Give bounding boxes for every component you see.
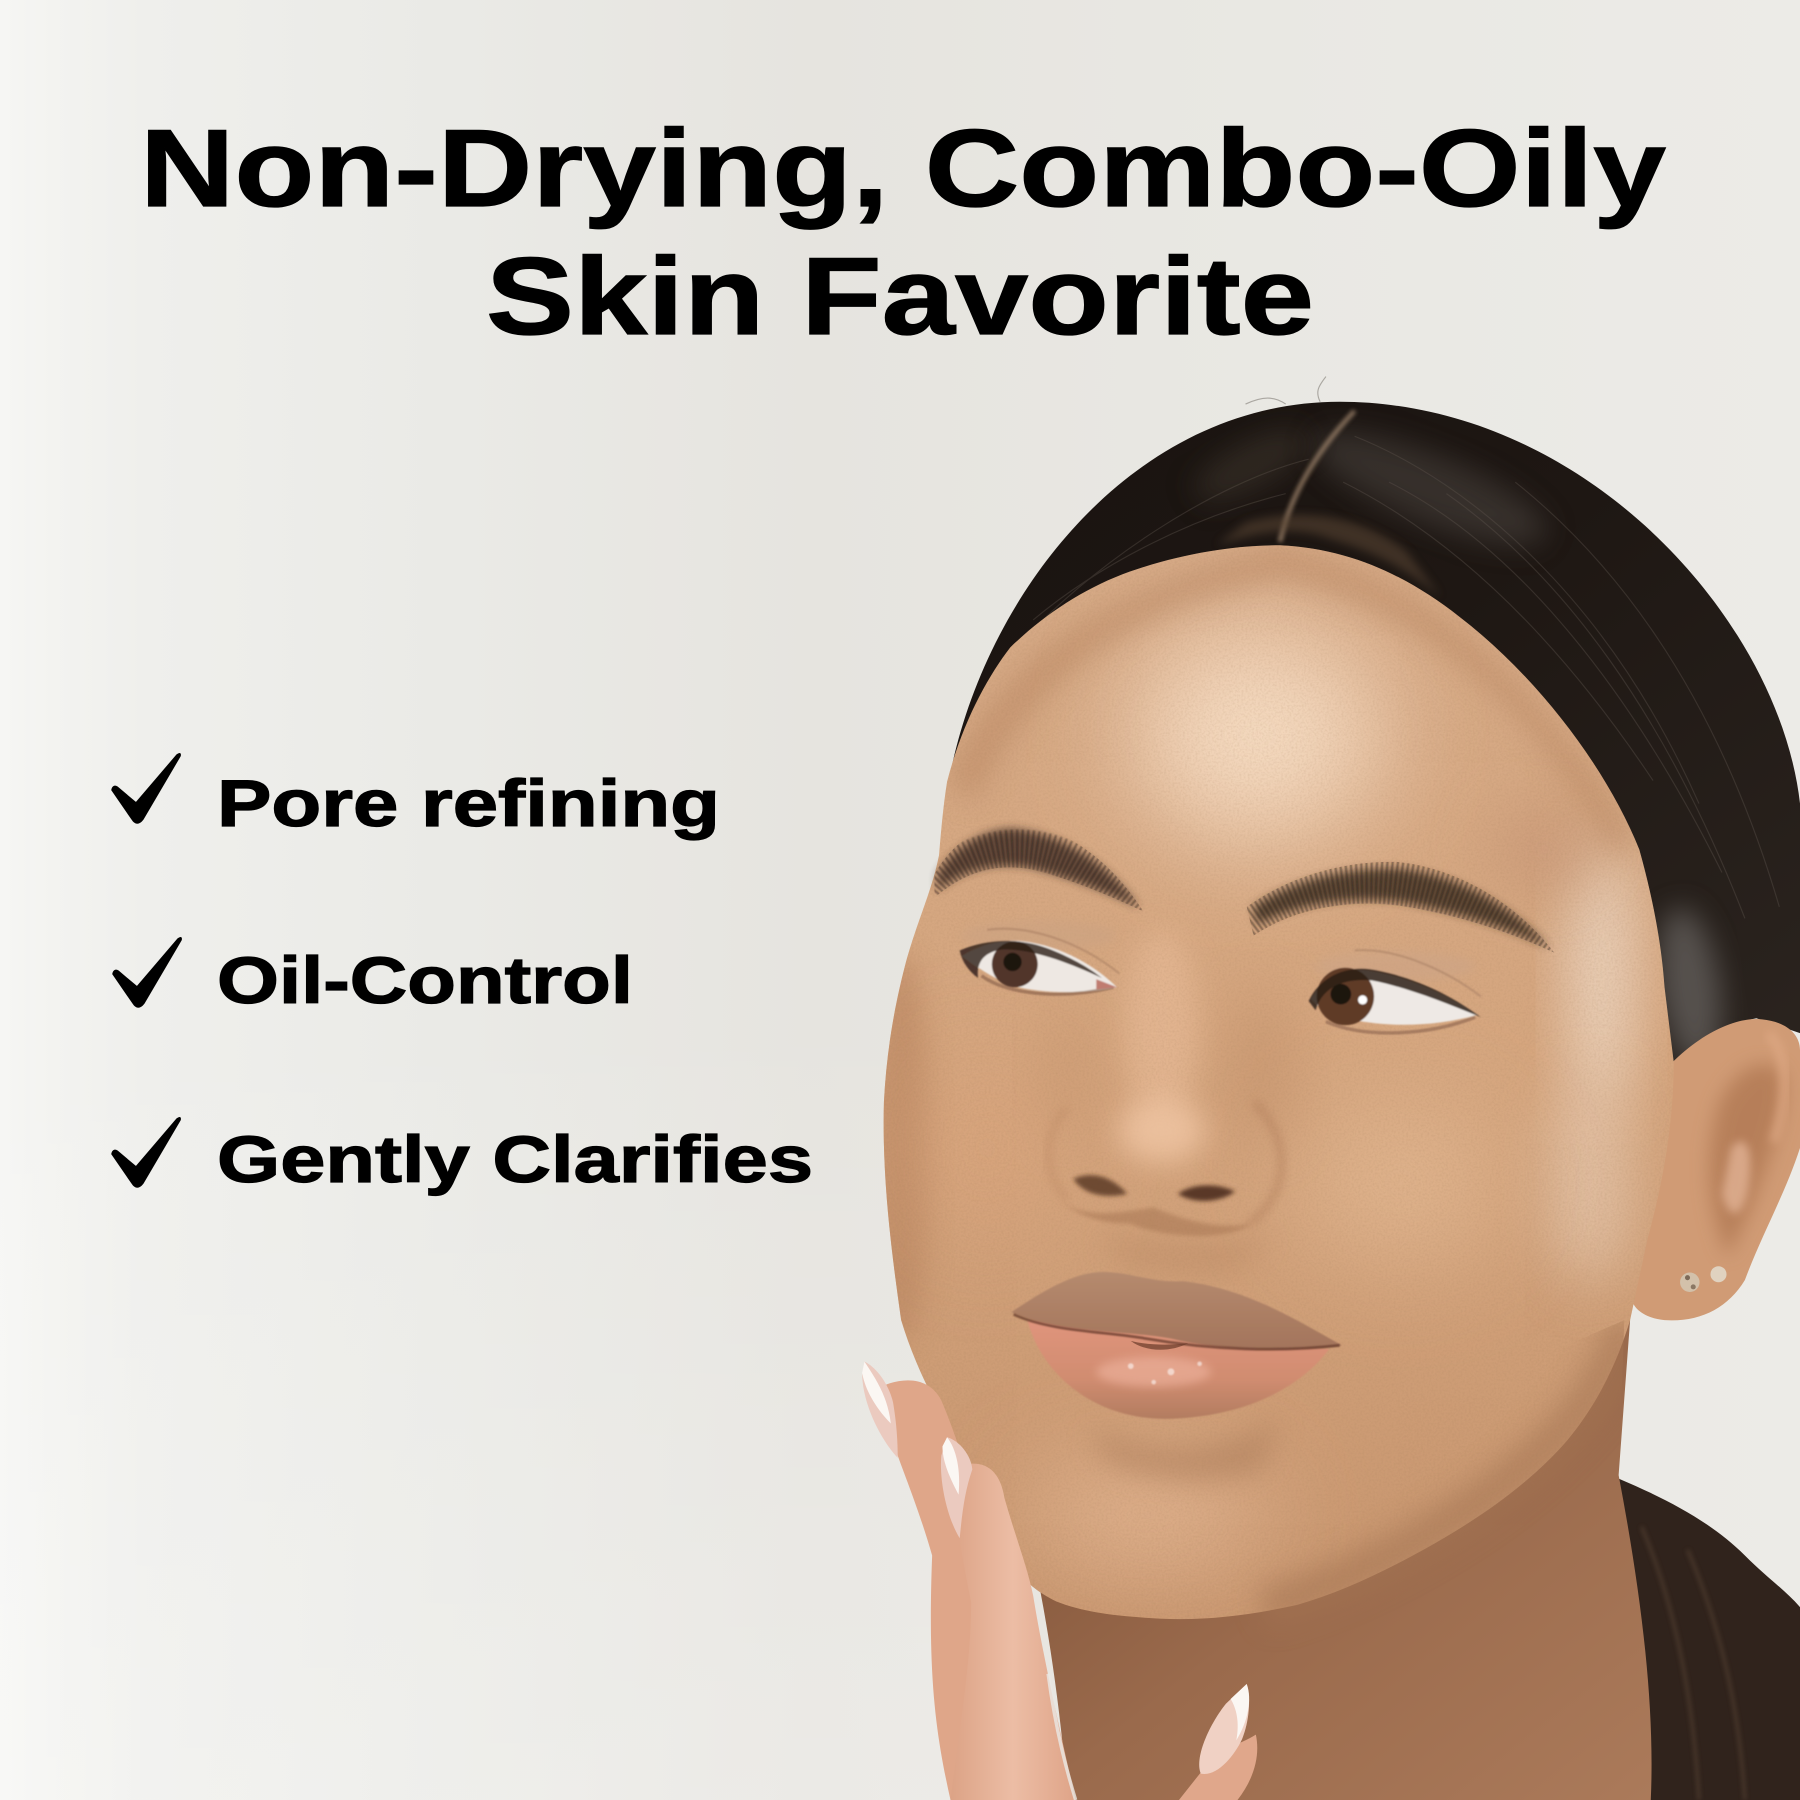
right eyebrow — [1246, 869, 1559, 959]
ponytail — [1619, 1479, 1800, 1800]
left eyebrow — [932, 829, 1148, 918]
earrings — [1680, 1266, 1727, 1292]
benefit: oil control: Oil-Control — [217, 943, 633, 1017]
forehead edge shade — [947, 545, 1639, 849]
skin texture — [872, 540, 1688, 1630]
jaw shadow — [1263, 1320, 1628, 1607]
hand and fingers — [862, 1361, 1257, 1800]
face — [871, 540, 1688, 1630]
nose — [1049, 1099, 1281, 1236]
ear — [1630, 1019, 1800, 1320]
photo: woman with hand on cheek — [862, 377, 1800, 1800]
title: Skin Favorite — [486, 235, 1314, 358]
nostrils — [1073, 1175, 1235, 1201]
icon: check mark — [112, 1118, 180, 1187]
brow blush — [1524, 820, 1602, 896]
hair — [947, 377, 1800, 1071]
forehead highlight — [1131, 626, 1383, 844]
under nose shadow — [1203, 1256, 1220, 1259]
front finger — [951, 1464, 1076, 1800]
thumb nail — [1199, 1684, 1249, 1774]
right eye — [1309, 950, 1481, 1033]
benefit: gently clarifies — [112, 1118, 813, 1196]
cheek glow — [1312, 1112, 1488, 1262]
chin highlight — [1022, 1464, 1274, 1567]
temple highlight — [1572, 838, 1631, 1114]
benefit: gently clarifies: Gently Clarifies — [217, 1122, 813, 1196]
benefit: pore refining — [112, 754, 720, 840]
neck — [1039, 1320, 1652, 1800]
nail one — [862, 1361, 898, 1458]
icon: check mark — [113, 938, 181, 1007]
left cheek shade — [884, 958, 932, 1334]
lips — [1011, 1272, 1342, 1419]
back finger — [886, 1380, 1033, 1800]
nose bridge glow — [1126, 938, 1200, 1102]
nail two — [941, 1437, 972, 1538]
thumb — [1179, 1735, 1257, 1800]
under lip shadow — [1100, 1430, 1272, 1486]
benefit: pore refining: Pore refining — [217, 766, 720, 840]
nose side shade — [1243, 1034, 1280, 1102]
icon: check mark — [112, 754, 180, 823]
benefit: oil control — [113, 938, 633, 1017]
title — [140, 107, 1666, 358]
left eye — [960, 921, 1119, 994]
title: Non-Drying, Combo-Oily — [140, 107, 1666, 230]
